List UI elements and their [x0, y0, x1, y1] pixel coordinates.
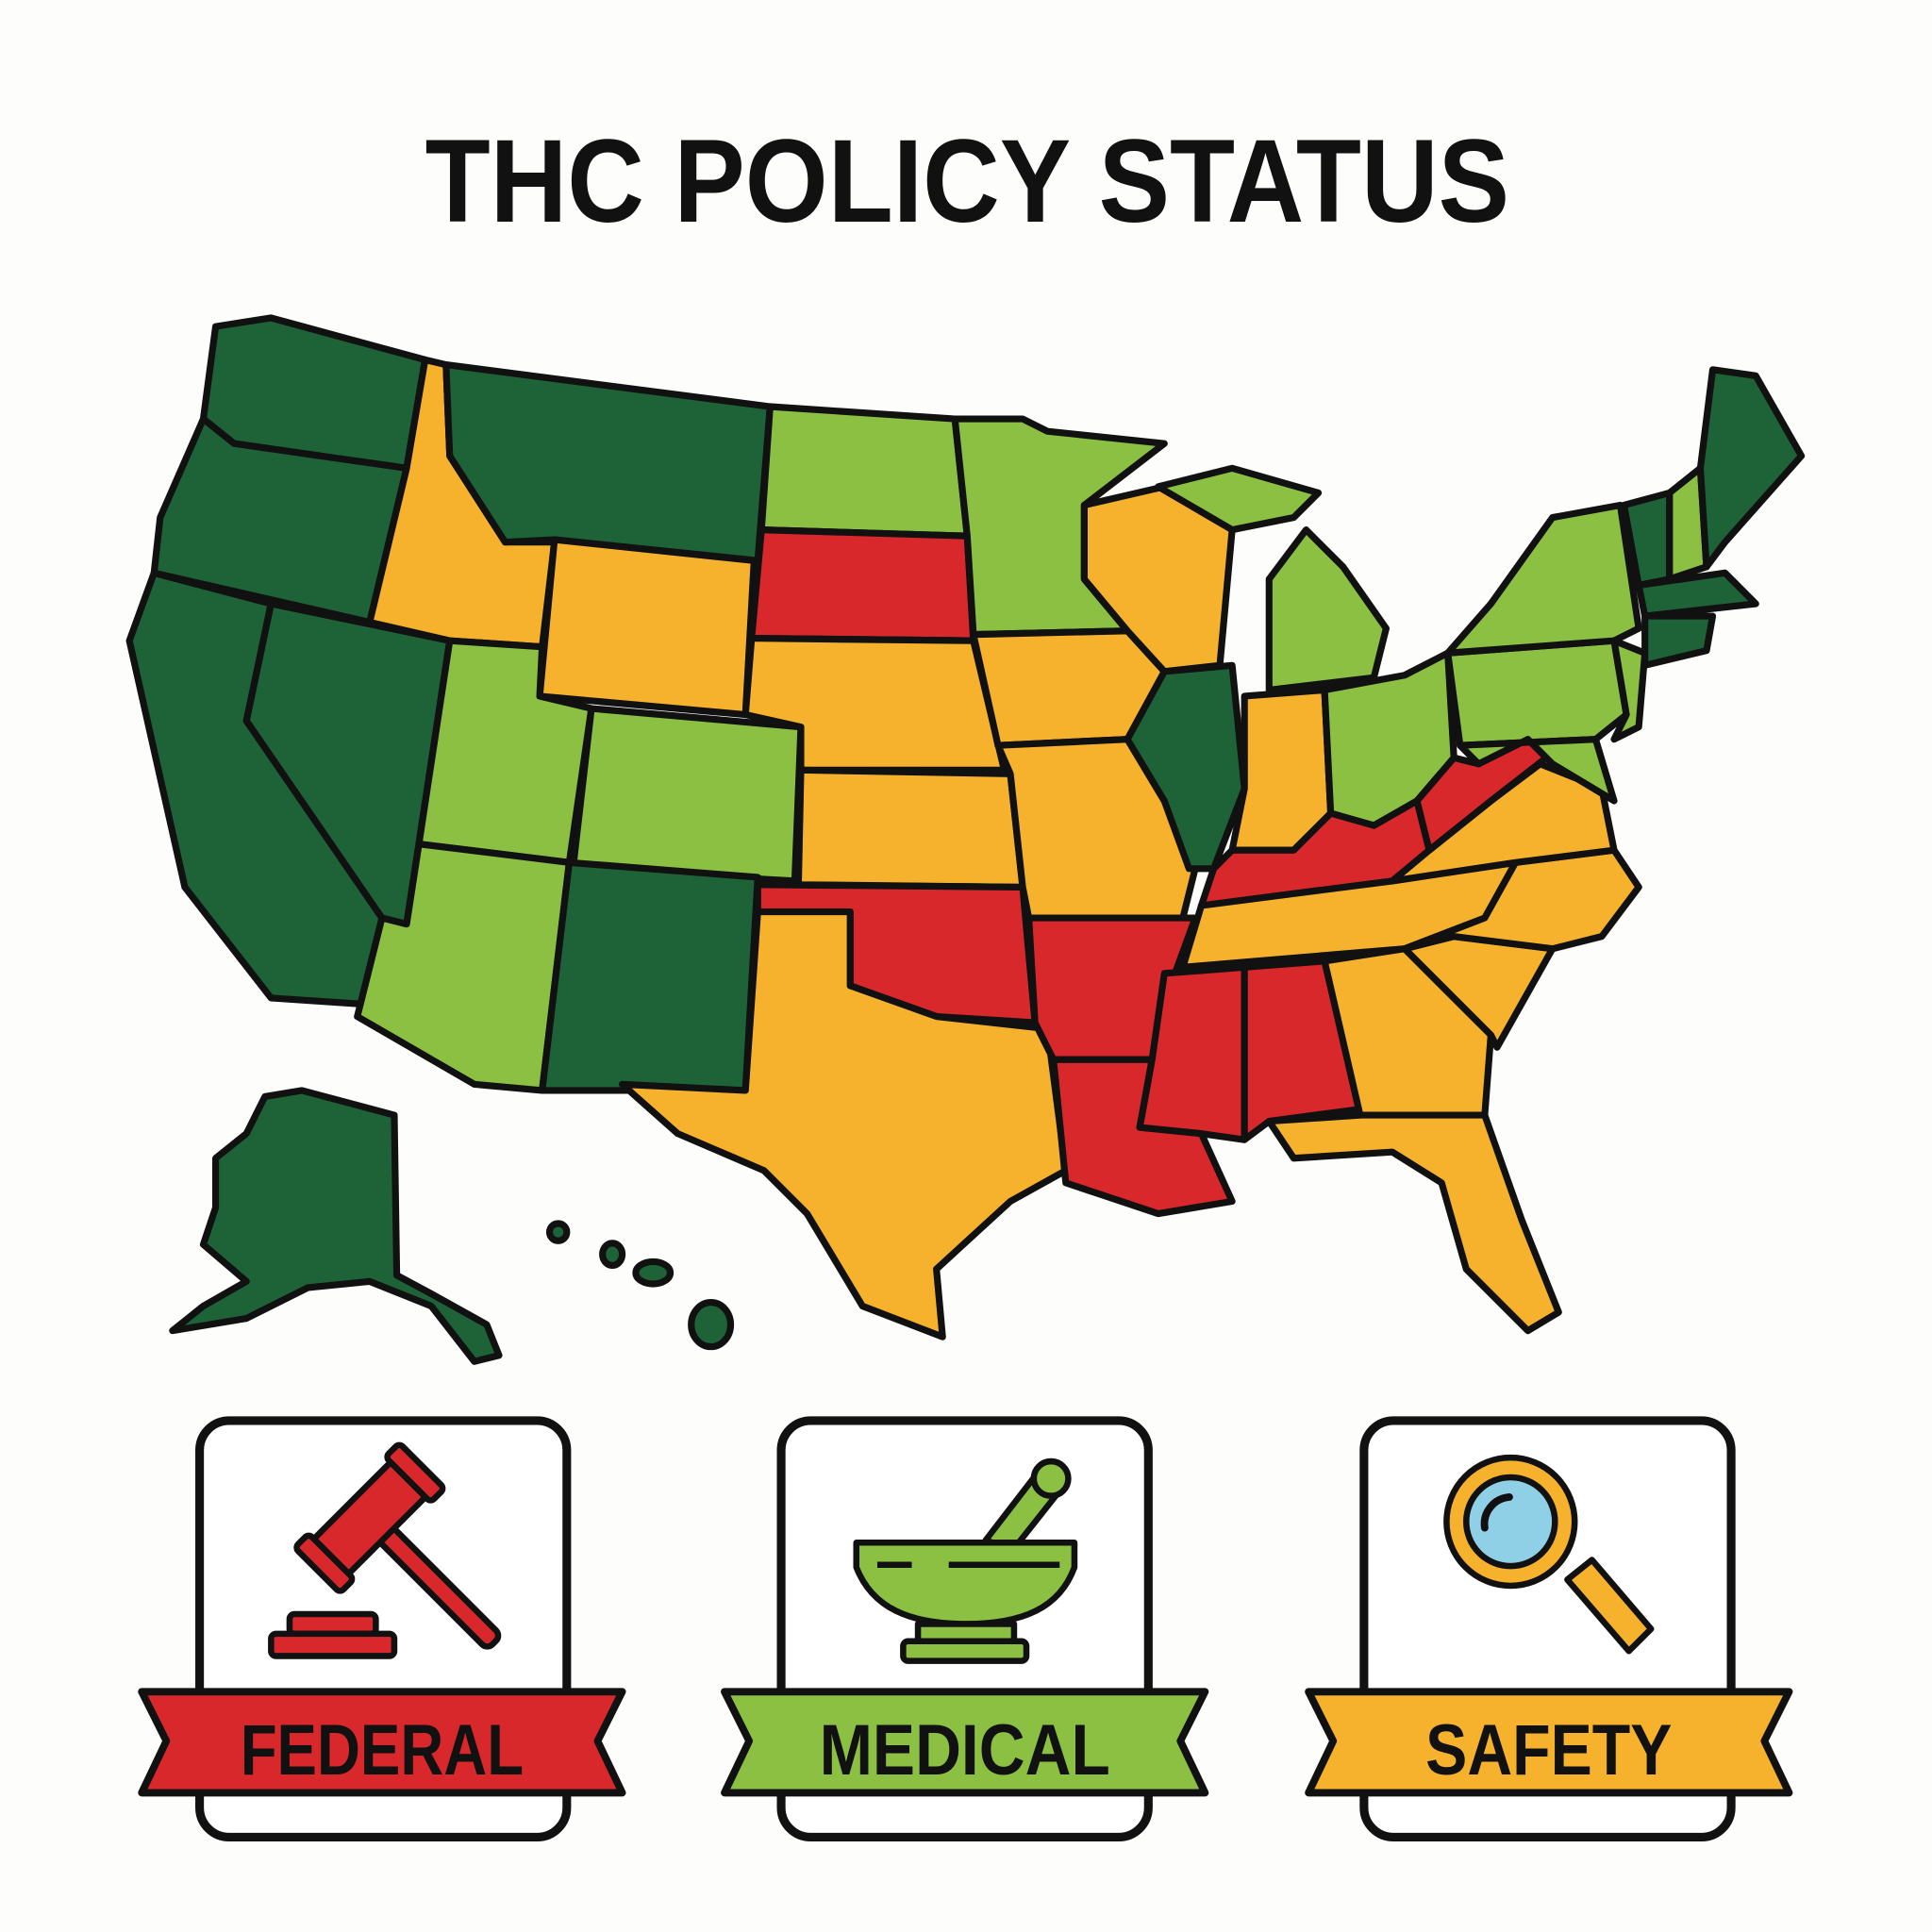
state: mississippi [1140, 967, 1244, 1140]
map: united states [129, 318, 1802, 1361]
ribbon: medical: MEDICAL [820, 1710, 1110, 1790]
state: west virginia [1417, 740, 1546, 850]
state: vermont [1624, 492, 1670, 585]
state: north dakota [761, 407, 967, 536]
state: virginia [1392, 764, 1614, 881]
state: hawaii [550, 1224, 731, 1347]
state: kentucky [1201, 801, 1429, 906]
state: alaska [173, 1091, 499, 1361]
state: north carolina [1405, 850, 1639, 949]
state: oregon [154, 419, 407, 623]
state: maine [1700, 370, 1802, 567]
state: tennessee [1183, 862, 1516, 967]
state: indiana [1232, 690, 1331, 850]
ribbon: medical [724, 1691, 1205, 1792]
state: georgia [1324, 949, 1491, 1122]
state: arizona [358, 844, 569, 1091]
ribbon: federal [142, 1691, 623, 1792]
state: nevada [246, 604, 450, 924]
state: alabama [1244, 961, 1361, 1140]
card: safety [1308, 1421, 1789, 1837]
state: illinois [1127, 665, 1244, 869]
state: new mexico [542, 862, 758, 1091]
ribbon: federal: FEDERAL [241, 1710, 524, 1790]
card: federal [142, 1421, 623, 1837]
icon: gavel [271, 1443, 546, 1695]
state: idaho [370, 359, 555, 647]
state: new jersey [1614, 641, 1645, 740]
state: missouri [998, 740, 1195, 918]
state: texas [623, 912, 1066, 1337]
state: south carolina [1405, 937, 1553, 1047]
title: THC POLICY STATUS [425, 114, 1509, 247]
state: iowa [974, 631, 1164, 745]
icon: magnifying glass [1446, 1457, 1651, 1651]
state: california [129, 573, 382, 1004]
state: wyoming [540, 540, 754, 715]
state: michigan [1158, 468, 1386, 690]
state: maryland delaware [1460, 740, 1614, 801]
state: colorado [573, 708, 801, 881]
state: wisconsin [1084, 487, 1232, 672]
state: south dakota [752, 530, 974, 641]
state: washington [204, 318, 425, 468]
state: connecticut rhode island [1645, 616, 1713, 665]
state: massachusetts [1639, 573, 1756, 616]
state: minnesota [955, 419, 1164, 635]
state: nebraska [745, 639, 1004, 770]
card: medical [724, 1421, 1205, 1837]
state: pennsylvania [1448, 641, 1626, 745]
ribbon: safety [1308, 1691, 1789, 1792]
state: utah [419, 641, 591, 862]
state: arkansas [1029, 918, 1195, 1059]
state: kansas [798, 770, 1023, 887]
icon: mortar and pestle [857, 1461, 1074, 1661]
ribbon: safety: SAFETY [1425, 1710, 1672, 1790]
state: new york [1448, 506, 1639, 653]
state: oklahoma [758, 885, 1035, 1023]
state: louisiana [1054, 1059, 1232, 1214]
state: montana [446, 365, 770, 560]
state: florida [1269, 1115, 1558, 1331]
state: new hampshire [1670, 468, 1707, 579]
state: ohio [1324, 653, 1454, 825]
